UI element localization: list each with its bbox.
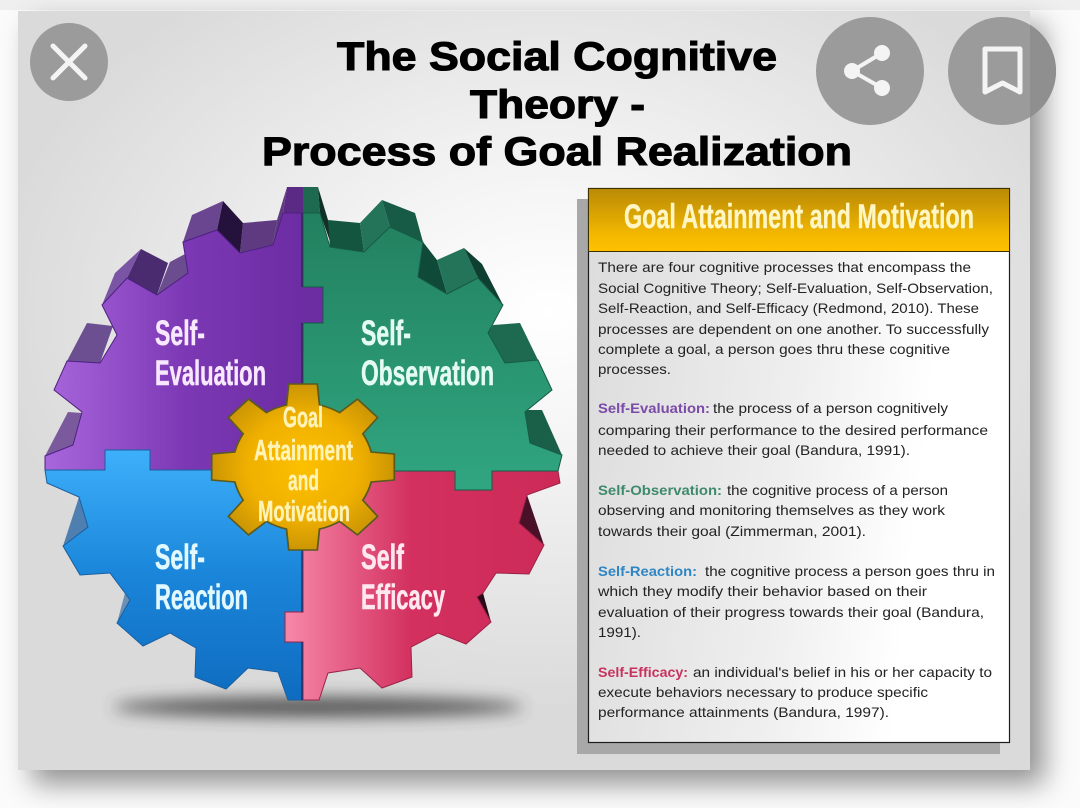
divider edges (301, 213, 303, 700)
title: Process of Goal Realization (262, 130, 852, 174)
title (262, 35, 852, 174)
label: Goal Attainment and Motivation: Motivation (258, 496, 350, 528)
3D tooth sides: purple (45, 187, 303, 456)
panel: Goal Attainment and Motivation (577, 188, 1010, 754)
label: Self-Observation: Self- (361, 314, 411, 353)
intro paragraph: complete a goal, a person goes thru these cognitive (598, 341, 950, 357)
segment: Self-Reaction (45, 450, 303, 700)
definition: Self-Evaluation (598, 400, 988, 458)
label: Self Efficacy (361, 538, 445, 617)
definition: Self-Observation: towards their goal (Zimmerman, 2001). (598, 523, 866, 539)
intro paragraph: There are four cognitive processes that encompass the (598, 259, 971, 275)
label: Self-Observation (361, 314, 494, 393)
label: Self-Observation: Observation (361, 354, 494, 393)
label: Goal Attainment and Motivation: Goal (283, 402, 323, 434)
definition: Self-Evaluation: comparing their performance to the desired performance (598, 422, 988, 438)
title: The Social Cognitive (337, 35, 777, 79)
definition: Self-Observation: Self-Observation: (598, 482, 722, 498)
label: Self-Evaluation: Evaluation (155, 354, 266, 393)
label: Goal Attainment and Motivation (254, 402, 353, 528)
label: Self-Reaction: Reaction (155, 578, 248, 617)
label: Self-Evaluation: Self- (155, 314, 205, 353)
segment: Self-Evaluation (45, 213, 323, 470)
icon: bookmark button (948, 17, 1056, 125)
definition: Self-Efficacy: Self-Efficacy: (598, 664, 688, 680)
icon: close button (30, 23, 108, 101)
definition: Self-Reaction: evaluation of their progress towards their goal (Bandura, (598, 604, 984, 620)
definition: Self-Reaction: which they modify their behavior based on their (597, 583, 927, 599)
segment: Self Efficacy (285, 471, 560, 700)
intro paragraph: Social Cognitive Theory; Self-Evaluation, Self-Observation, (598, 280, 993, 296)
center gear (212, 384, 394, 550)
panel body (588, 188, 1010, 742)
panel shadow (577, 199, 1000, 754)
definition: Self-Reaction: Self-Reaction: (598, 563, 697, 579)
intro paragraph: processes are dependent on one another. To successfully (598, 321, 989, 337)
definition: Self-Reaction (597, 563, 995, 640)
label: Goal Attainment and Motivation: Attainment (254, 435, 353, 467)
intro paragraph (598, 259, 993, 377)
definition: Self-Efficacy: an individual's belief in his or her capacity to (693, 664, 992, 680)
intro paragraph: Self-Reaction, and Self-Efficacy (Redmond, 2010). These (598, 300, 979, 316)
ground shadow (113, 697, 523, 717)
definition: Self-Observation: the cognitive process of a person (727, 482, 948, 498)
definition: Self-Observation (598, 482, 948, 539)
label: Goal Attainment and Motivation: and (288, 465, 319, 497)
definition: Self-Reaction: the cognitive process a person goes thru in (705, 563, 995, 579)
panel header (588, 188, 1010, 252)
label: Self-Evaluation (155, 314, 266, 393)
label: Self Efficacy: Self (361, 538, 404, 577)
label: Self Efficacy: Efficacy (361, 578, 445, 617)
definition: Self-Observation: observing and monitoring themselves as they work (598, 502, 946, 518)
title: Theory - (470, 83, 645, 127)
gear diagram (45, 187, 562, 700)
definition: Self-Evaluation: Self-Evaluation: (598, 400, 710, 416)
definition: Self-Evaluation: needed to achieve their goal (Bandura, 1991). (598, 442, 910, 458)
definition: Self-Reaction: 1991). (598, 624, 641, 640)
definition: Self-Evaluation: the process of a person cognitively (713, 400, 948, 416)
3D tooth sides: blue and pink (63, 495, 544, 623)
icon: share button (816, 17, 924, 125)
3D tooth sides: green (303, 187, 562, 455)
definition: Self-Efficacy (598, 664, 992, 720)
label: Self-Reaction: Self- (155, 538, 205, 577)
intro paragraph: processes. (598, 361, 671, 377)
segment: Self-Observation (303, 213, 562, 490)
definition: Self-Efficacy: execute behaviors necessary to produce specific (598, 684, 928, 700)
definition: Self-Efficacy: performance attainments (Bandura, 1997). (598, 704, 889, 720)
label: Self-Reaction (155, 538, 248, 617)
